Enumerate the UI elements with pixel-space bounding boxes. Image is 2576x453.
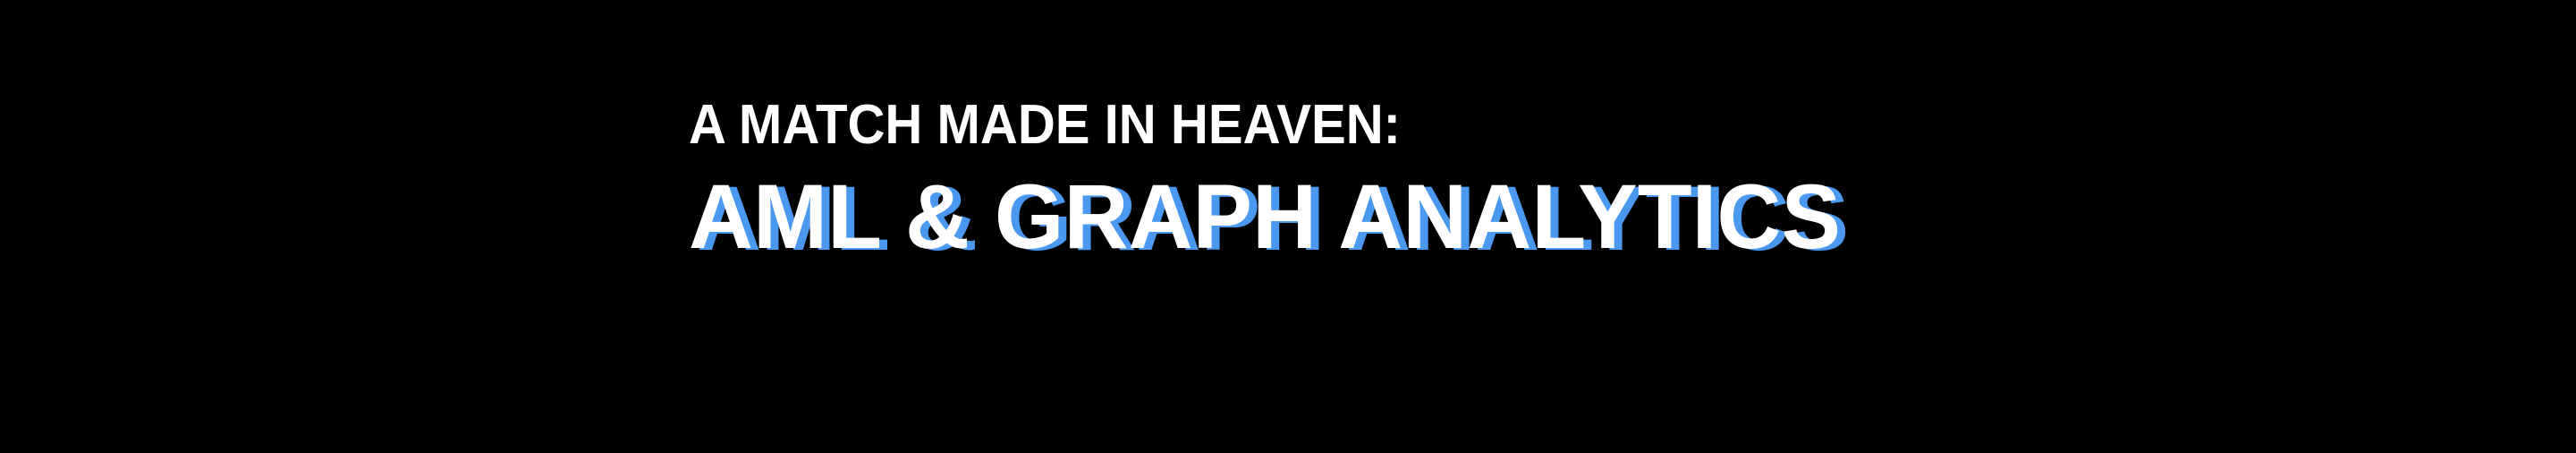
title with blue shadow: AML & GRAPH ANALYTICS: [697, 167, 1849, 269]
subtitle: A MATCH MADE IN HEAVEN:: [689, 94, 1401, 156]
title with blue shadow: AML & GRAPH ANALYTICS: [689, 166, 1841, 268]
